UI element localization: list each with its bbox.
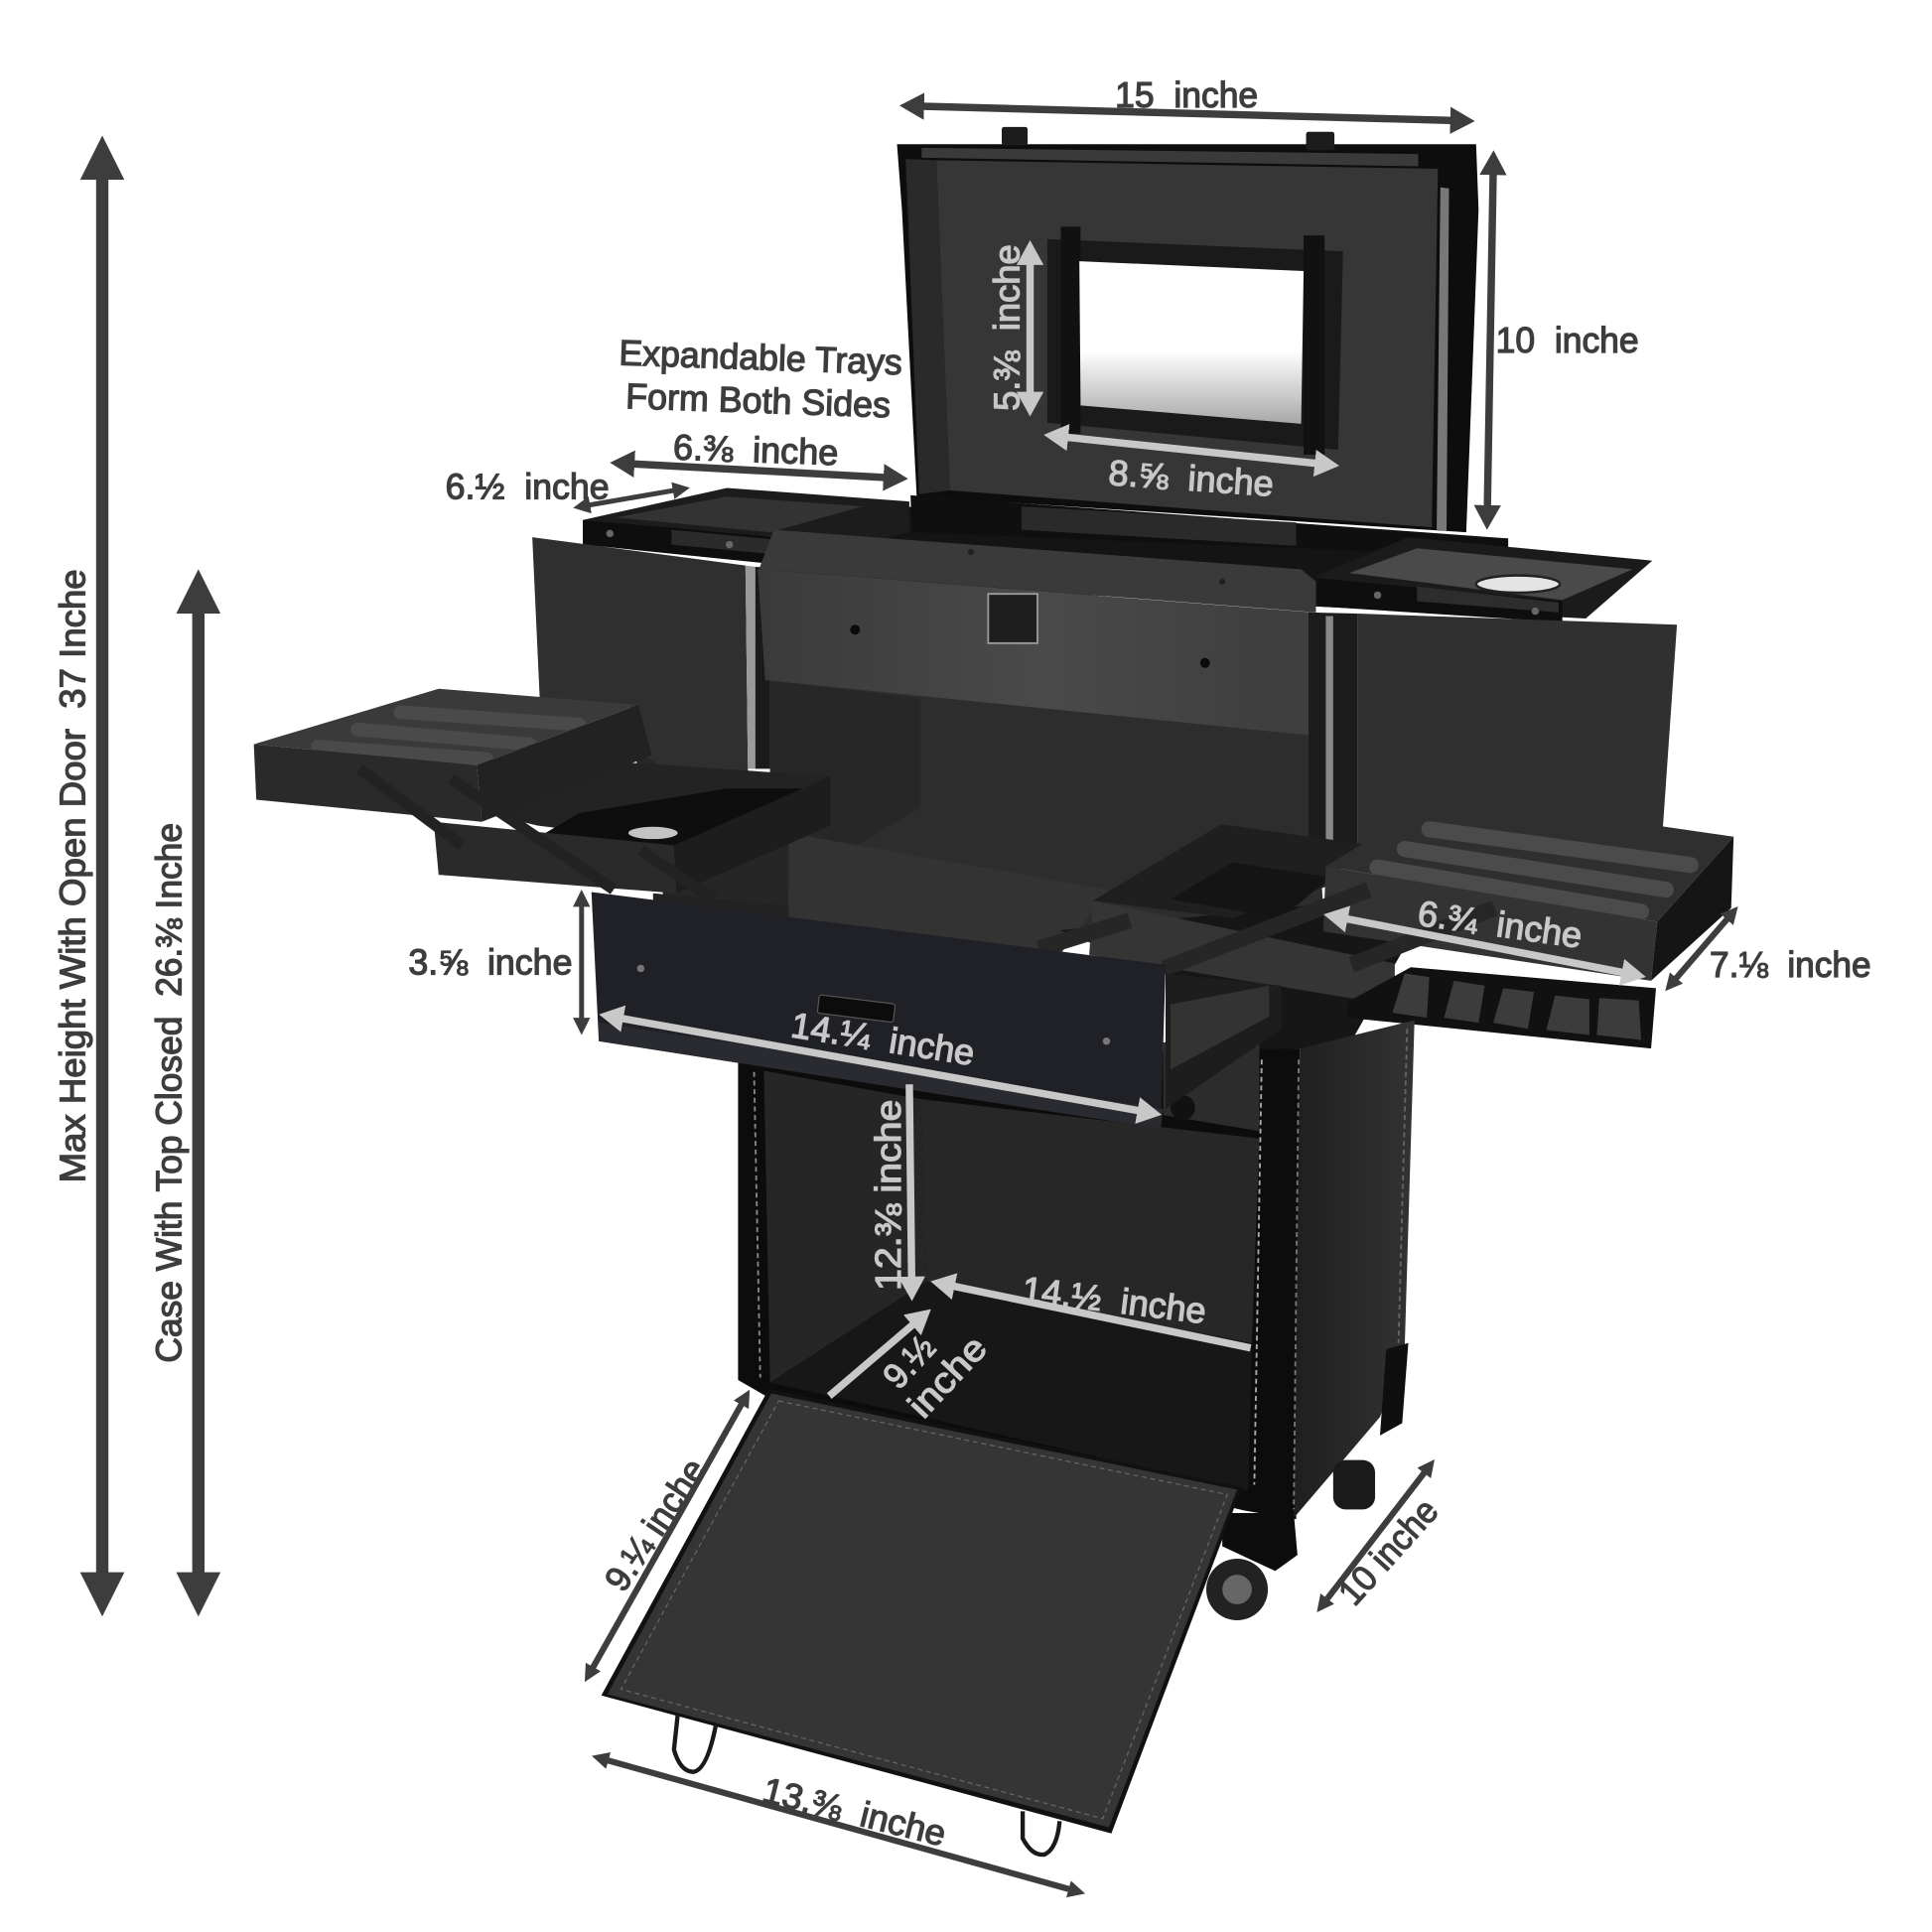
lid left strip xyxy=(905,159,950,494)
left lower tray xyxy=(434,761,830,894)
drawer handle xyxy=(817,995,896,1023)
dimension: tray width: 6.⅜ inche xyxy=(672,427,839,473)
dimension: drawer width: 14.¼ inche xyxy=(788,1004,977,1073)
left top expandable tray xyxy=(583,487,909,564)
right tray arms xyxy=(1038,890,1494,968)
dimension: case depth: 10 inche xyxy=(1330,1490,1447,1613)
backing behind rail and flap xyxy=(763,499,1508,617)
dimension: right tray depth: 7.⅛ inche xyxy=(1710,944,1871,985)
tray rollers xyxy=(1378,829,1691,911)
label: expandable trays: Form Both Sides xyxy=(625,375,892,425)
front plate xyxy=(758,569,1328,736)
lower case body xyxy=(738,1021,1415,1519)
dimension: lid width: 15 inche xyxy=(1115,74,1258,115)
mirror strap left xyxy=(1061,226,1080,434)
left tray arms xyxy=(359,768,715,899)
dimension: door depth xyxy=(589,1397,746,1675)
dimension: inner depth: inche xyxy=(899,1327,995,1426)
dimension: right tray width xyxy=(1335,893,1634,975)
dimension: door width xyxy=(600,1758,1077,1891)
paper clips xyxy=(628,827,678,839)
lid with mirror xyxy=(897,127,1478,532)
dimension: door width: 13.⅜ inche xyxy=(759,1769,950,1854)
area under drawer xyxy=(1164,1033,1259,1131)
inner back wall xyxy=(920,1099,1259,1343)
label: expandable trays: Expandable Trays xyxy=(619,332,903,382)
dimension: mirror width: 8.⅝ inche xyxy=(1107,452,1275,504)
mirror glass xyxy=(1079,261,1304,424)
lid right strip xyxy=(1437,188,1449,531)
drawer front xyxy=(592,893,1166,1129)
dimension: right tray width: 6.¾ inche xyxy=(1416,893,1585,956)
dimension: mirror width xyxy=(1056,436,1327,504)
drawer slide xyxy=(1166,973,1282,1109)
brush pockets xyxy=(1348,967,1656,1048)
top hinge rail xyxy=(910,495,1508,557)
under-tray struts on right xyxy=(1059,905,1411,1109)
dimension: inner height: 12.⅜ inche xyxy=(868,1100,908,1291)
right door panel xyxy=(1309,613,1677,863)
left door panel xyxy=(532,537,770,778)
side panel xyxy=(1294,1021,1415,1518)
dimension: tray depth: 6.½ inche xyxy=(446,467,610,507)
dimension: right tray depth xyxy=(1671,913,1871,985)
lid felt lining xyxy=(936,160,1438,527)
tray hole xyxy=(1476,576,1560,593)
left upper tray xyxy=(254,689,652,822)
inner left wall xyxy=(763,1070,926,1382)
door leg right xyxy=(1023,1811,1059,1855)
latch box xyxy=(988,594,1037,643)
tray rollers xyxy=(318,712,579,759)
dimension: tray width xyxy=(622,427,896,479)
inner floor xyxy=(770,1282,1252,1491)
wheel bracket xyxy=(1380,1343,1409,1436)
dimension: tray depth xyxy=(446,467,681,507)
dimension: mirror height: 5.⅜ inche xyxy=(986,244,1027,411)
latch left xyxy=(1002,127,1028,145)
dimension: lid height: 10 inche xyxy=(1496,320,1639,360)
mirror frame xyxy=(1047,239,1343,450)
dimension: inner width: 14.½ inche xyxy=(1020,1269,1208,1331)
fold-down door xyxy=(602,1389,1242,1855)
right upper tray xyxy=(1323,794,1733,981)
wheels xyxy=(1206,1460,1375,1620)
dimension: closed height: Case With Top Closed 26.⅜ Inche xyxy=(148,823,189,1363)
dimension: drawer height: 3.⅝ inche xyxy=(408,942,572,983)
latch right xyxy=(1307,132,1334,150)
right top expandable tray xyxy=(1317,537,1652,622)
drawer inner back xyxy=(634,752,1109,955)
dimension: inner depth: 9.½ xyxy=(875,1327,943,1396)
dimension: inner depth xyxy=(829,1317,995,1426)
right lower tray xyxy=(1089,824,1395,1006)
dimension: inner width xyxy=(942,1269,1251,1348)
dimension: door depth: 9.¼ inche xyxy=(596,1450,714,1598)
door leg left xyxy=(674,1716,716,1772)
label: expandable trays xyxy=(619,332,903,425)
top flap plate xyxy=(759,530,1315,613)
dimension: lid height xyxy=(1487,163,1639,517)
cavity behind front plate xyxy=(770,678,1325,949)
dimension: lid width xyxy=(911,74,1462,121)
dimension: drawer width xyxy=(612,1004,1150,1113)
dimension: max height: Max Height With Open Door 37 Inche xyxy=(53,569,93,1182)
mirror strap right xyxy=(1304,235,1324,455)
lid top bar xyxy=(921,148,1418,167)
